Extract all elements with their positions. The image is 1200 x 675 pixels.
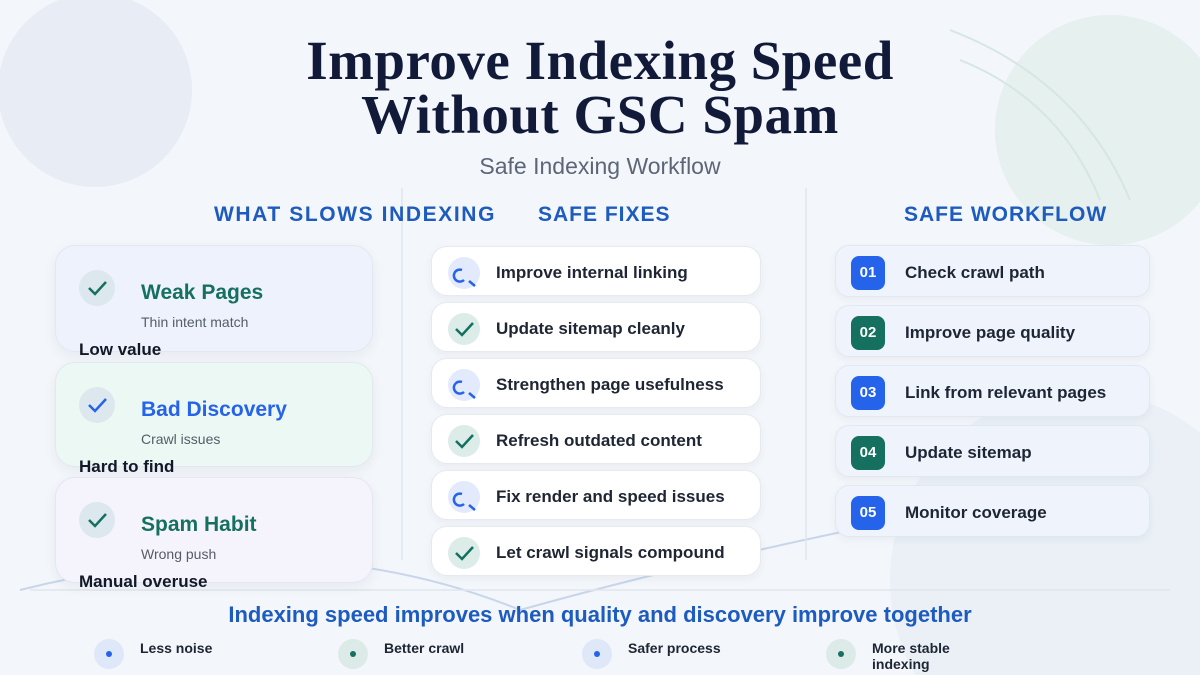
benefits row: [94, 639, 950, 672]
step 04: Update sitemap: [905, 443, 1032, 462]
fix 1: Improve internal linking: [496, 263, 688, 282]
fix 3: Strengthen page usefulness: [496, 375, 724, 394]
benefit: less noise: [94, 639, 124, 669]
fix 5: [431, 470, 761, 520]
benefits row: Safer process: [628, 640, 721, 656]
card: spam habit: [55, 477, 373, 583]
step 05: 05: [860, 504, 876, 521]
title: Without GSC Spam: [361, 84, 839, 145]
card: bad discovery: Hard to find: [79, 457, 174, 476]
card: weak pages: Low value: [79, 340, 161, 359]
card: bad discovery: Bad Discovery: [141, 398, 287, 421]
panel: what slows indexing: [55, 245, 373, 591]
benefits row: More stable: [872, 640, 950, 656]
benefit: better crawl: [338, 639, 368, 669]
panel: safe workflow: [835, 245, 1150, 537]
benefit: safer process: [582, 639, 612, 669]
step 01: 01: [860, 264, 876, 281]
card: weak pages: [55, 245, 373, 352]
step 04: [835, 425, 1150, 477]
step 02: 02: [860, 324, 876, 341]
step 03: [835, 365, 1150, 417]
card: weak pages: Thin intent match: [141, 314, 248, 330]
subtitle: Safe Indexing Workflow: [479, 153, 721, 179]
fix 5: Fix render and speed issues: [496, 487, 725, 506]
benefits row: indexing: [872, 656, 930, 672]
fix 6: Let crawl signals compound: [496, 543, 725, 562]
step 01: Check crawl path: [905, 263, 1045, 282]
step 04: 04: [860, 444, 876, 461]
step 05: [835, 485, 1150, 537]
fix 2: [431, 302, 761, 352]
card: bad discovery: Crawl issues: [141, 431, 220, 447]
fix 4: Refresh outdated content: [496, 431, 702, 450]
step 02: [835, 305, 1150, 357]
card: spam habit: Spam Habit: [141, 513, 257, 536]
step 03: 03: [860, 384, 876, 401]
benefits row: Less noise: [140, 640, 212, 656]
step 02: Improve page quality: [905, 323, 1075, 342]
fix 4: [431, 414, 761, 464]
heading: safe workflow: SAFE WORKFLOW: [904, 203, 1107, 226]
fix 2: Update sitemap cleanly: [496, 319, 685, 338]
title: [306, 30, 894, 145]
card: spam habit: Manual overuse: [79, 572, 208, 591]
bottom takeaway: Indexing speed improves when quality and discovery improve together: [228, 602, 972, 627]
fix 3: [431, 358, 761, 408]
card: weak pages: Weak Pages: [141, 281, 263, 304]
fix 6: [431, 526, 761, 576]
card: bad discovery: [55, 362, 373, 467]
heading: what slows indexing: WHAT SLOWS INDEXING: [214, 203, 496, 226]
step 03: Link from relevant pages: [905, 383, 1106, 402]
benefits row: Better crawl: [384, 640, 464, 656]
benefit: more stable indexing: [826, 639, 856, 669]
fix 1: [431, 246, 761, 296]
step 01: [835, 245, 1150, 297]
title: Improve Indexing Speed: [306, 30, 894, 91]
heading: safe fixes: SAFE FIXES: [538, 203, 671, 226]
panel: safe fixes: [431, 246, 761, 576]
step 05: Monitor coverage: [905, 503, 1047, 522]
card: spam habit: Wrong push: [141, 546, 216, 562]
